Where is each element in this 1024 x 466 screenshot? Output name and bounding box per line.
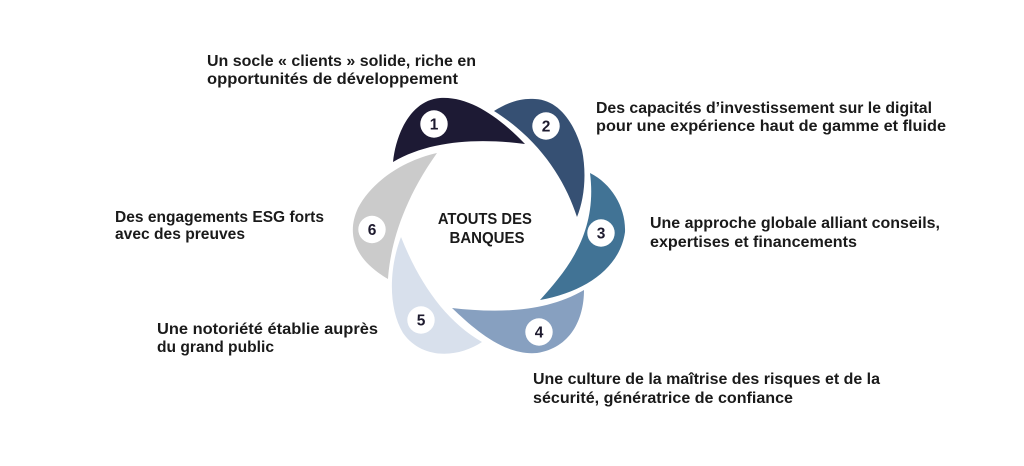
segment 6: grey petal	[353, 153, 437, 279]
label 2: pour une expérience haut de gamme et fluide	[596, 118, 946, 135]
label 5: Une notoriété établie auprès	[157, 321, 378, 338]
segment 2: slate blue petal: 2	[542, 118, 550, 136]
label 1: Un socle « clients » solide, riche en	[207, 53, 476, 70]
centre title: BANQUES	[450, 230, 524, 247]
segment 4: periwinkle petal: 4	[535, 324, 544, 342]
segment 2: slate blue petal	[494, 99, 584, 217]
label 6: Des engagements ESG forts	[115, 209, 324, 226]
label 6: avec des preuves	[115, 226, 245, 243]
label 2: Des capacités d’investissement sur le digital	[596, 100, 932, 117]
segment 1: dark navy petal	[393, 98, 525, 162]
label 3: expertises et financements	[650, 234, 857, 251]
label 3: Une approche globale alliant conseils,	[650, 215, 940, 232]
segment 4: periwinkle petal	[452, 290, 584, 353]
segment 5: pale blue petal	[392, 237, 482, 354]
label 1: opportunités de développement	[207, 71, 458, 88]
label 4: Une culture de la maîtrise des risques et de la	[533, 371, 880, 388]
label 4: sécurité, génératrice de confiance	[533, 390, 793, 407]
segment 3: teal blue petal	[540, 173, 625, 300]
segment 5: pale blue petal: 5	[417, 312, 426, 330]
label 5: du grand public	[157, 339, 274, 356]
segment 1: dark navy petal: 1	[430, 116, 439, 134]
centre title: ATOUTS DES	[438, 211, 532, 228]
segment 3: teal blue petal: 3	[597, 226, 606, 242]
segment 6: grey petal: 6	[368, 222, 377, 239]
